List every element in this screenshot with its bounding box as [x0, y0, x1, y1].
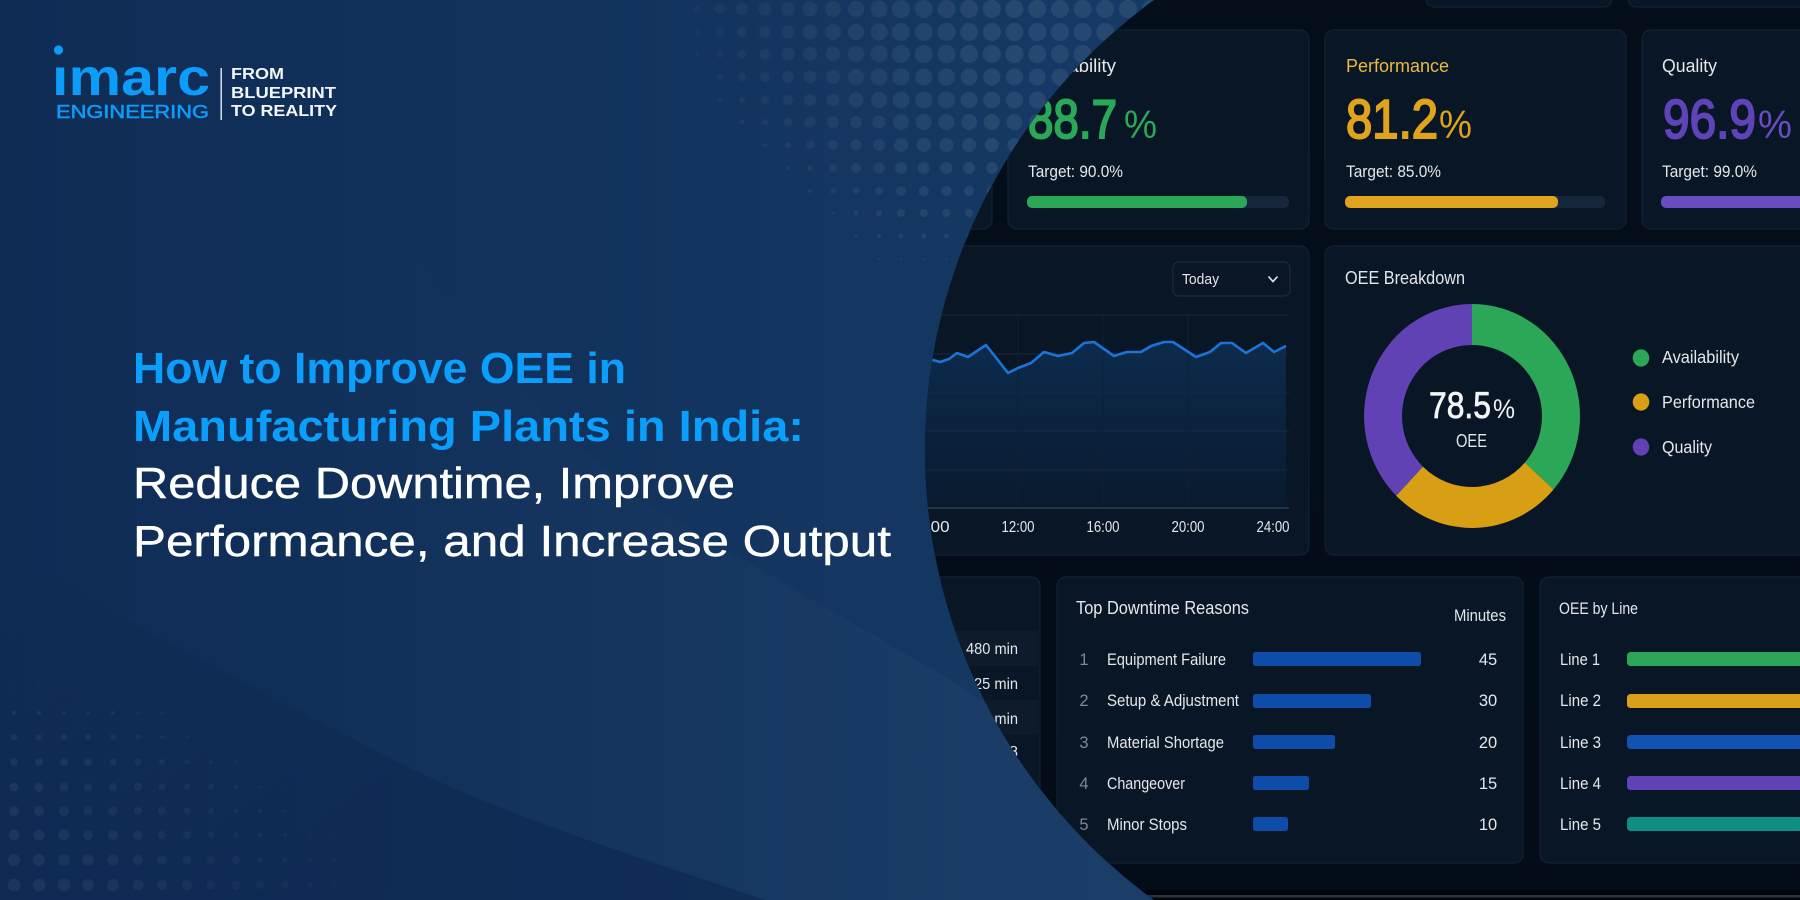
card: OEE breakdown	[1325, 246, 1800, 555]
laptop bezel strip	[1140, 890, 1800, 900]
title	[133, 344, 891, 566]
card: downtime summary fragment	[940, 576, 1040, 790]
logo tagline: TO REALITY	[231, 103, 338, 120]
card: availability: %	[1124, 104, 1157, 147]
donut chart	[1364, 304, 1580, 528]
x axis labels	[931, 521, 1289, 532]
card: performance: 81.2	[1346, 88, 1438, 150]
logo tagline	[231, 66, 338, 120]
trend area fill	[900, 342, 1286, 508]
card: availability	[1008, 30, 1309, 229]
card: availability: Availability	[1028, 55, 1117, 76]
logo divider	[220, 68, 222, 120]
row labels	[1107, 651, 1239, 834]
card: OEE breakdown: OEE Breakdown	[1345, 268, 1465, 288]
card: performance	[1325, 30, 1626, 229]
x axis labels: 20:00	[1172, 519, 1205, 536]
card: downtime summary fragment: 480 min	[966, 641, 1018, 658]
x axis labels: 12:00	[1002, 519, 1035, 536]
card: OEE by line: Line 1	[1560, 651, 1600, 669]
donut legend: Quality	[1662, 437, 1712, 457]
row numbers	[1079, 651, 1089, 834]
title highlighted lines: How to Improve OEE in	[133, 344, 626, 393]
logo tagline: BLUEPRINT	[231, 85, 337, 102]
card: downtime summary fragment: 25 min	[974, 676, 1018, 693]
logo word engineering: ENGINEERING	[56, 102, 209, 122]
card: performance: Performance	[1346, 55, 1449, 76]
top card fragments	[1426, 0, 1800, 7]
trend line	[900, 342, 1286, 373]
bars	[1253, 652, 1421, 831]
dropdown: today	[1173, 262, 1290, 296]
row labels: Material Shortage	[1107, 734, 1224, 752]
logo: imarc engineering	[52, 45, 338, 122]
donut chart: %	[1493, 394, 1515, 424]
values: 15	[1479, 775, 1497, 793]
donut chart: 78.5	[1429, 385, 1491, 426]
values: 10	[1479, 816, 1497, 834]
values: 45	[1479, 651, 1497, 669]
card: OEE by line: Line 4	[1560, 775, 1601, 793]
card: quality: Quality	[1662, 55, 1718, 76]
x axis labels: 8:00	[916, 519, 950, 536]
logo wordmark imarc: imarc	[52, 49, 210, 107]
donut legend: Performance	[1662, 392, 1755, 412]
card: OEE by line: OEE by Line	[1559, 599, 1638, 618]
row numbers: 5	[1079, 816, 1089, 834]
card: top downtime reasons	[1057, 577, 1523, 863]
donut legend: Availability	[1662, 347, 1739, 367]
chart grid	[900, 315, 1289, 508]
dot pattern: bottom left	[8, 687, 335, 891]
row numbers: 4	[1079, 775, 1089, 793]
row numbers: 3	[1079, 734, 1089, 752]
card: quality	[1642, 30, 1800, 229]
values: 20	[1479, 734, 1497, 752]
card: OEE by line: Line 2	[1560, 692, 1601, 710]
card: quality: %	[1758, 104, 1792, 147]
card: top downtime reasons: Minutes	[1454, 607, 1506, 625]
x axis labels: 16:00	[1086, 519, 1120, 536]
card: OEE by line: Line 3	[1560, 734, 1601, 752]
card: top downtime reasons: Top Downtime Reasons	[1076, 598, 1249, 618]
panel: dashboard screenshot	[860, 0, 1800, 900]
title highlighted lines: Manufacturing Plants in India:	[133, 402, 804, 451]
x axis labels: 24:00	[1256, 519, 1290, 536]
card: downtime summary fragment: 15 min	[974, 711, 1018, 728]
row labels: Changeover	[1107, 775, 1185, 793]
dropdown: today: Today	[1182, 271, 1219, 288]
card: OEE by line	[1540, 577, 1800, 863]
subtitle lines	[133, 459, 891, 566]
donut legend	[1633, 347, 1755, 457]
row numbers: 2	[1079, 692, 1089, 710]
card: availability: 88.7	[1028, 88, 1117, 150]
card: OEE trend chart	[925, 246, 1310, 556]
card: performance: Target: 85.0%	[1346, 163, 1441, 181]
card: quality: Target: 99.0%	[1662, 163, 1757, 181]
card: performance: %	[1439, 104, 1472, 147]
row labels: Equipment Failure	[1107, 651, 1226, 669]
logo dot	[54, 45, 63, 55]
row numbers: 1	[1079, 651, 1089, 669]
card: quality: 96.9	[1663, 88, 1756, 150]
logo tagline: FROM	[231, 66, 284, 83]
card: OEE by line: Line 5	[1560, 816, 1601, 834]
card: OEE fragment	[970, 184, 992, 230]
card: downtime summary fragment: 8	[1009, 744, 1018, 761]
dot pattern: top	[694, 0, 1160, 260]
values	[1479, 651, 1497, 834]
row labels: Setup & Adjustment	[1107, 692, 1239, 710]
row labels: Minor Stops	[1107, 816, 1187, 834]
subtitle lines: Performance, and Increase Output	[133, 517, 891, 566]
donut chart: OEE	[1456, 430, 1487, 451]
card: availability: Target: 90.0%	[1028, 163, 1123, 181]
title highlighted lines	[133, 344, 804, 451]
values: 30	[1479, 692, 1497, 710]
subtitle lines: Reduce Downtime, Improve	[133, 459, 735, 508]
